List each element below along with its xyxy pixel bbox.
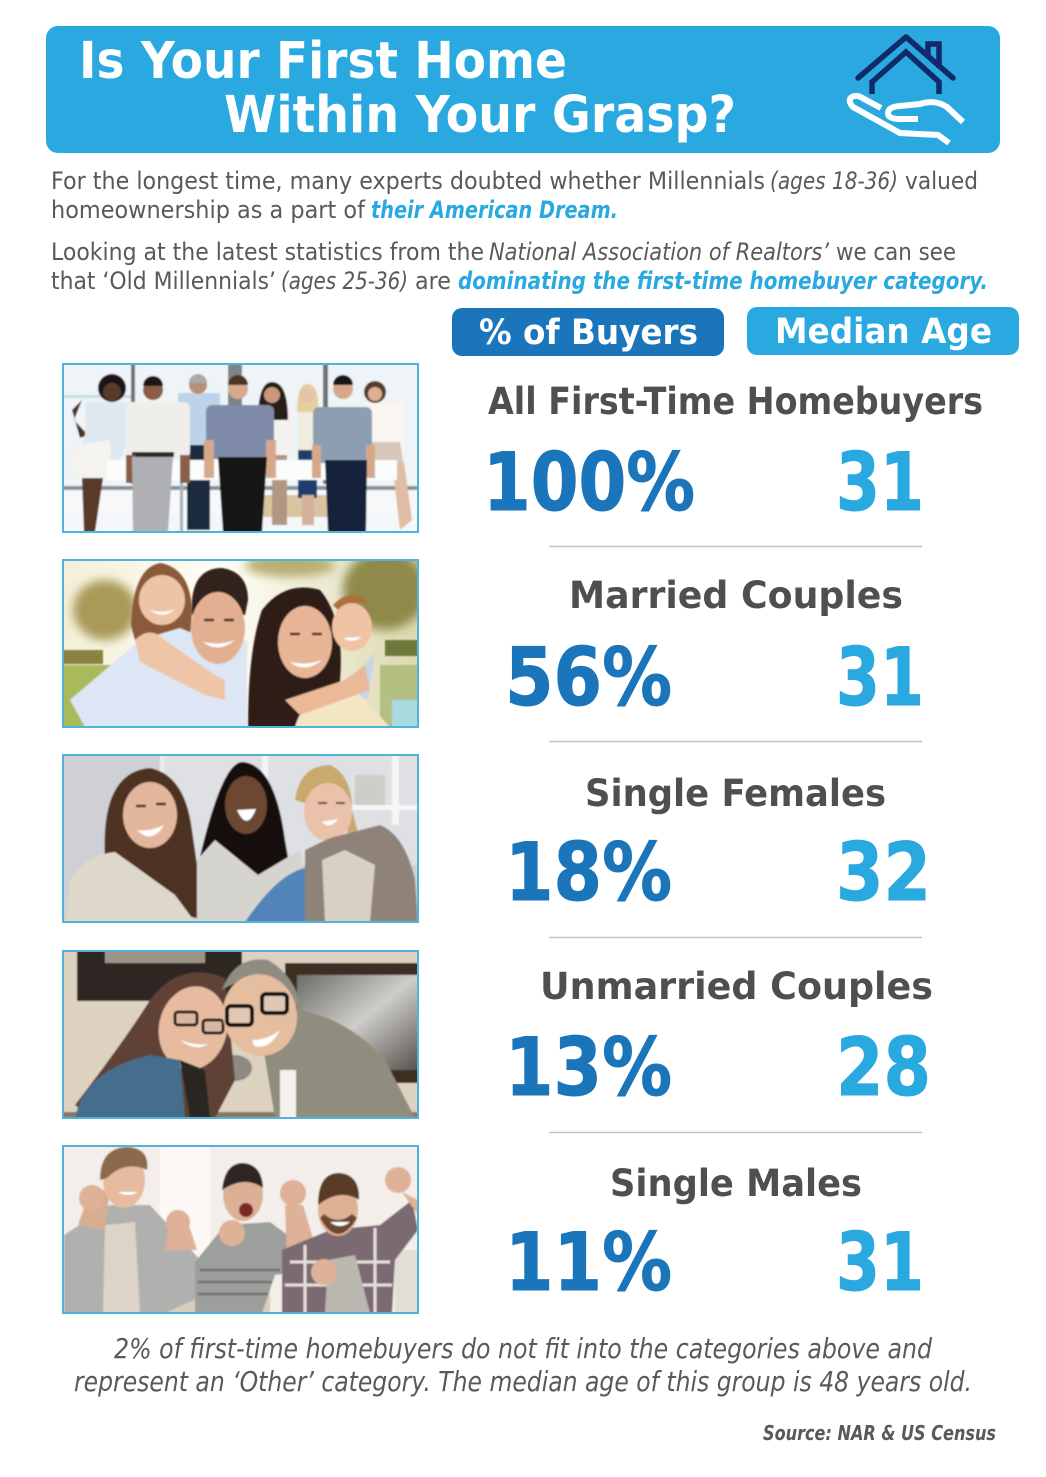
column header: % of Buyers: % of Buyers [479,313,698,353]
label: Single Females [505,772,886,919]
stat: median age 28: 28 [836,1021,931,1114]
label: Unmarried Couples [505,965,933,1114]
title [79,32,736,145]
intro paragraph 2: are [415,267,451,295]
label: Married Couples [505,574,903,724]
stat: median age 32: 32 [836,826,931,919]
intro paragraph 2: (ages 25-36) [281,267,408,295]
footnote [74,1332,972,1398]
intro paragraph 2: that ‘Old Millennials’ [51,267,276,295]
photo: married couple with two children [63,550,427,727]
stat: 11% of buyers: 11% [505,1216,672,1309]
intro paragraph 2: National Association of Realtors’ [489,238,829,266]
photo: unmarried couple with glasses [63,951,418,1118]
title: Is Your First Home [79,32,567,91]
photo: three cheering men [63,1146,418,1313]
intro paragraph 1: their American Dream. [371,196,618,224]
intro paragraph 1: homeownership as a part of [51,196,366,224]
label: Single Males [505,1162,862,1309]
intro paragraph 2 [51,238,988,295]
label: All First-Time Homebuyers: All First-Time Homebuyers [488,380,983,423]
stat: 13% of buyers: 13% [505,1021,672,1114]
icon: house in open hand [850,37,963,143]
intro paragraph 1: For the longest time, many experts doubted whether Millennials [51,167,765,195]
stat: 56% of buyers: 56% [505,631,672,724]
photo: three laughing women [63,755,418,922]
intro paragraph 1: (ages 18-36) [770,167,898,195]
intro paragraph 2: we can see [836,238,956,266]
title: Within Your Grasp? [224,86,736,145]
label: Unmarried Couples: Unmarried Couples [540,965,933,1008]
intro paragraph 2: Looking at the latest statistics from the [51,238,484,266]
stat: median age 31: 31 [836,631,924,724]
intro paragraph 1 [51,167,978,224]
header banner [46,26,1000,153]
column header: Median Age: Median Age [775,312,992,352]
stat: median age 31: 31 [836,1216,924,1309]
label: Single Males: Single Males [610,1162,862,1205]
label: Single Females: Single Females [585,772,886,815]
stat: 100% of buyers: 100% [483,436,695,529]
intro paragraph 1: valued [905,167,978,195]
label: All First-Time Homebuyers [483,380,983,529]
label: Married Couples: Married Couples [569,574,903,617]
stat: median age 31: 31 [836,436,924,529]
photo: group of eight young professionals [63,364,418,532]
source: Source: NAR & US Census [763,1421,996,1445]
stat: 18% of buyers: 18% [505,826,672,919]
